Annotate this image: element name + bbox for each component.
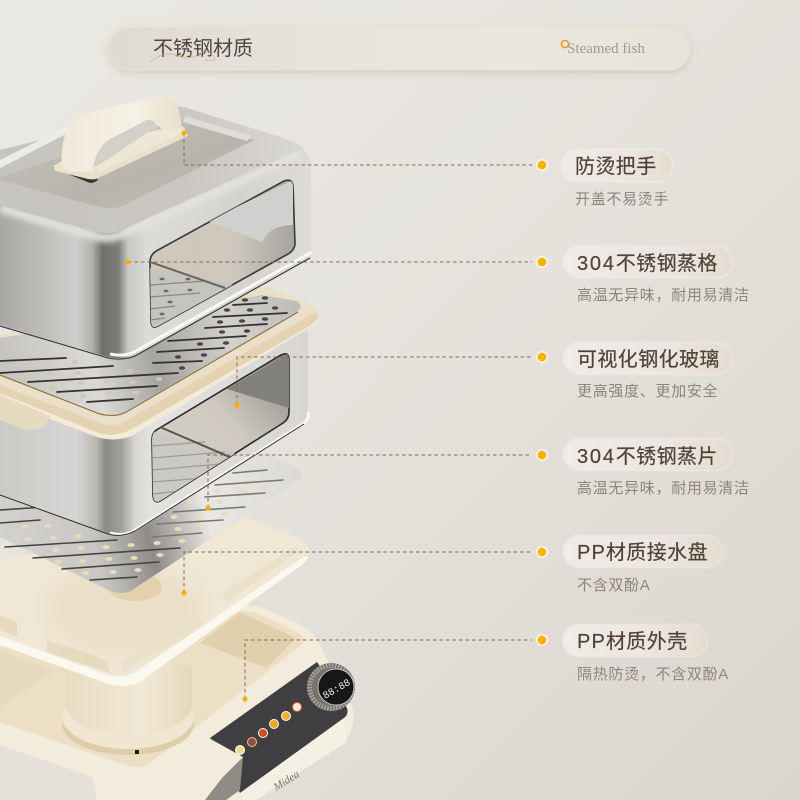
callout: handle <box>562 150 672 208</box>
tray lower rim <box>0 556 308 686</box>
lid handle <box>53 97 188 183</box>
base shell <box>0 600 354 800</box>
callout: glass: 更高强度、更加安全 <box>577 382 718 400</box>
upper plate <box>0 295 301 414</box>
drip tray <box>0 518 310 686</box>
callout: shell: 隔热防烫，不含双酚A <box>577 666 729 683</box>
callout: handle: 防烫把手 <box>575 155 657 178</box>
brand logo: Midea <box>271 768 302 794</box>
control panel <box>145 662 355 800</box>
callout: handle: 开盖不易烫手 <box>575 191 669 208</box>
base inner cavity <box>0 600 304 767</box>
callout: steam plate: 高温无异味，耐用易清洁 <box>577 480 750 497</box>
rim side tab <box>0 395 50 430</box>
drain hole <box>108 573 162 601</box>
callout: drip tray: PP材质接水盘 <box>577 541 708 564</box>
callout: steam plate: 304不锈钢蒸片 <box>577 445 718 468</box>
header orange ring <box>561 40 569 48</box>
middle steam box <box>0 330 308 535</box>
lid top face <box>0 106 311 238</box>
callout: drip tray: 不含双酚A <box>577 577 651 594</box>
callout: shell: PP材质外壳 <box>577 630 688 653</box>
glass window <box>150 180 295 330</box>
water box <box>145 737 243 800</box>
callout: steam grid: 304不锈钢蒸格 <box>577 252 718 275</box>
leader 1 <box>181 130 548 171</box>
knob <box>307 663 355 711</box>
lid body faces <box>0 150 313 358</box>
header script flourish <box>150 50 215 62</box>
callout: drip tray <box>564 536 722 594</box>
middle glass window <box>152 353 289 510</box>
callout: steam plate <box>564 439 750 497</box>
tray lips <box>47 640 110 673</box>
leader 6 <box>242 634 548 702</box>
upper tray with cream rim <box>0 287 319 440</box>
top lid <box>0 97 313 359</box>
header title: 不锈钢材质 <box>153 37 253 60</box>
callout: steam grid: 高温无异味，耐用易清洁 <box>577 287 750 304</box>
callout: steam grid <box>564 247 750 304</box>
knob display: 88:88 <box>322 678 353 702</box>
leader 5 <box>181 546 548 596</box>
callout: shell <box>563 625 729 683</box>
header bar <box>109 27 690 70</box>
callout: glass: 可视化钢化玻璃 <box>577 348 720 371</box>
leader 2 <box>125 256 548 268</box>
water pedestal <box>62 693 194 755</box>
callout: glass <box>564 343 732 400</box>
mode icons <box>236 702 302 754</box>
product: steamer exploded view <box>0 97 355 800</box>
header english label: Steamed fish <box>567 41 645 57</box>
leader 4 <box>205 449 548 511</box>
leader 3 <box>234 351 548 408</box>
steam plate <box>0 453 302 593</box>
